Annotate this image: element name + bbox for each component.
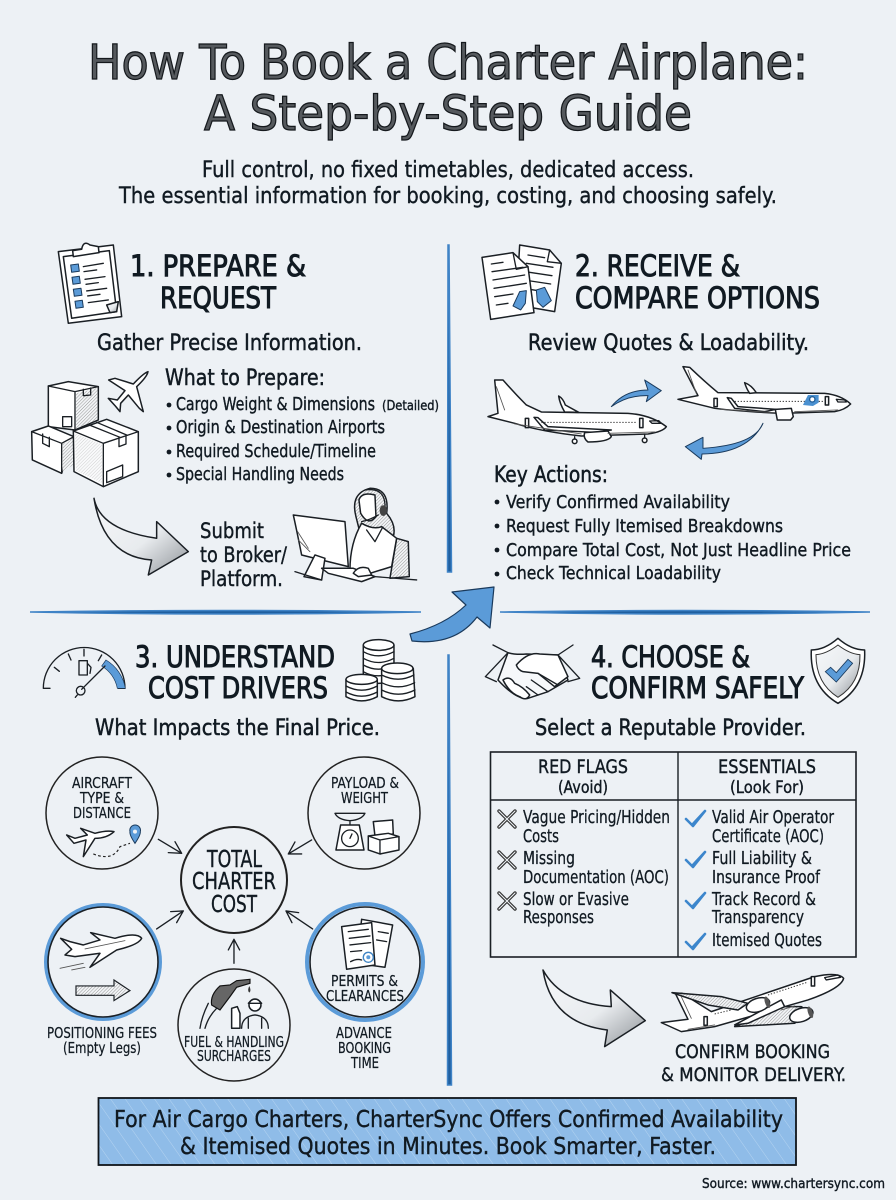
text block: confirm booking: CONFIRM BOOKING [675,1041,830,1063]
label: positioning fees: (Empty Legs) [63,1039,141,1057]
column: red flags [499,756,670,928]
icon: handshake [485,645,580,699]
callout banner: For Air Cargo Charters, CharterSync Offers Confirmed Availability [114,1107,783,1133]
subtitle: The essential information for booking, costing, and choosing safely. [118,184,777,209]
icon: quote documents with tags [482,245,561,319]
column: essentials: ESSENTIALS [718,756,816,778]
heading: step 2: 2. RECEIVE & [575,249,740,283]
column: red flags: Vague Pricing/Hidden [523,808,670,828]
divider: horizontal left [30,610,421,614]
column: essentials: (Look For) [730,778,804,798]
heading: step 3 [135,640,335,705]
driver: aircraft type and distance [46,757,158,869]
heading: step 1 [130,249,306,315]
label: advance booking time: ADVANCE [336,1024,392,1042]
text block: what to prepare: Cargo Weight & Dimensions [176,394,375,415]
driver: payload and weight: WEIGHT [341,789,389,807]
divider: vertical top [448,245,452,572]
hub: total charter cost [181,827,287,933]
arrow: confirm [543,970,645,1047]
driver: permits and clearances: PERMITS & [331,972,398,990]
text block: submit to broker: to Broker/ [200,543,288,567]
table: red flags vs essentials [490,752,856,957]
heading: step 2: COMPARE OPTIONS [575,281,820,315]
heading: step 1: 1. PREPARE & [130,249,306,283]
driver: fuel and handling surcharges [178,969,290,1081]
hub: total charter cost: TOTAL [206,847,262,873]
driver: permits and clearances [307,904,423,1020]
text block: key actions: Request Fully Itemised Breakdowns [506,516,783,537]
column: red flags: (Avoid) [558,778,608,798]
hub: total charter cost: COST [211,892,258,918]
callout banner: & Itemised Quotes in Minutes. Book Smarter, Faster. [180,1134,716,1160]
label: advance booking time: TIME [350,1054,379,1072]
text block: confirm booking: & MONITOR DELIVERY. [661,1064,846,1086]
hub: total charter cost: CHARTER [192,869,276,895]
arrow: section 2 to 3 connector [410,587,494,642]
panel: step 3 cost drivers [43,640,423,1081]
subtitle [118,158,777,209]
column: essentials: Insurance Proof [712,868,821,888]
arrow: compare forward [611,380,661,407]
text block: confirm booking [661,1041,846,1086]
callout banner [98,1098,796,1165]
column: essentials: Full Liability & [712,849,812,869]
heading: step 2 [575,249,820,315]
icon: cargo boxes and plane [32,372,148,487]
driver: permits and clearances: CLEARANCES [326,987,404,1005]
text block: what to prepare: Special Handling Needs [176,464,344,485]
subheading: step 2: Review Quotes & Loadability. [528,331,809,356]
icon: airliner right [678,367,851,420]
column: red flags: Responses [523,908,594,928]
column: essentials: Track Record & [711,890,816,910]
column: red flags: RED FLAGS [538,756,628,778]
driver: fuel and handling surcharges: SURCHARGES [197,1047,271,1065]
text block: key actions: Compare Total Cost, Not Just Headline Price [506,540,851,561]
text block: key actions: Key Actions: [494,463,608,488]
driver: positioning fees [46,905,160,1019]
icon: broker at computer [293,488,417,582]
text block: submit to broker: Platform. [200,567,283,591]
text block: what to prepare: Origin & Destination Airports [176,417,385,438]
subheading: step 1: Gather Precise Information. [97,331,362,356]
driver: fuel and handling surcharges: FUEL & HANDLING [184,1033,284,1051]
label: positioning fees [47,1024,157,1057]
heading: step 4: CONFIRM SAFELY [591,671,804,705]
icon: departing airliner [661,974,844,1032]
column: essentials: Valid Air Operator [712,808,835,828]
driver: aircraft type and distance: TYPE & [79,789,124,807]
arrow: submit [94,498,188,575]
text block: key actions [494,463,851,584]
divider: horizontal right [500,610,870,614]
subtitle: Full control, no fixed timetables, dedicated access. [202,158,694,183]
icon: airliner left [488,380,666,444]
heading: step 3: COST DRIVERS [148,671,328,705]
column: red flags: Missing [523,849,575,869]
label: positioning fees: POSITIONING FEES [47,1024,157,1042]
icon: clipboard [58,243,122,323]
label: advance booking time [336,1024,392,1072]
column: essentials: Transparency [711,908,804,928]
column: essentials: Itemised Quotes [712,931,822,951]
column: essentials: Certificate (AOC) [712,827,824,847]
panel: step 1 prepare and request [32,243,439,591]
title: A Step-by-Step Guide [204,86,692,142]
text block: what to prepare [165,366,439,485]
text block: what to prepare: (Detailed) [382,399,439,414]
text block: key actions: Verify Confirmed Availability [506,492,730,513]
divider: vertical bottom [448,655,452,1085]
icon: shield with check [811,638,865,703]
title [88,35,808,142]
icon: fuel gauge [43,647,125,697]
driver: payload and weight: PAYLOAD & [331,774,399,792]
heading: step 1: REQUEST [160,281,276,315]
heading: step 4: 4. CHOOSE & [591,640,750,674]
column: red flags: Costs [523,827,559,847]
panel: step 4 choose and confirm [485,638,865,1086]
panel: step 2 receive and compare [482,245,851,584]
heading: step 4 [591,640,804,705]
column: essentials [686,756,835,951]
text block: what to prepare: What to Prepare: [165,366,325,391]
text block: what to prepare: Required Schedule/Timeline [176,441,376,462]
text block: key actions: Check Technical Loadability [506,563,721,584]
column: red flags: Documentation (AOC) [523,868,669,888]
heading: step 3: 3. UNDERSTAND [135,640,335,674]
arrow: compare back [685,423,763,459]
column: red flags: Slow or Evasive [523,890,629,910]
subheading: step 4: Select a Reputable Provider. [535,716,806,741]
arrows: drivers to hub [157,839,313,963]
text block: submit to broker [200,519,288,591]
driver: payload and weight [308,757,420,869]
label: advance booking time: BOOKING [338,1039,391,1057]
driver: aircraft type and distance: AIRCRAFT [72,774,133,792]
title: How To Book a Charter Airplane: [88,35,808,91]
icon: coin stacks [346,640,415,701]
driver: aircraft type and distance: DISTANCE [73,804,131,822]
subheading: step 3: What Impacts the Final Price. [95,716,380,741]
text block: submit to broker: Submit [200,519,264,543]
